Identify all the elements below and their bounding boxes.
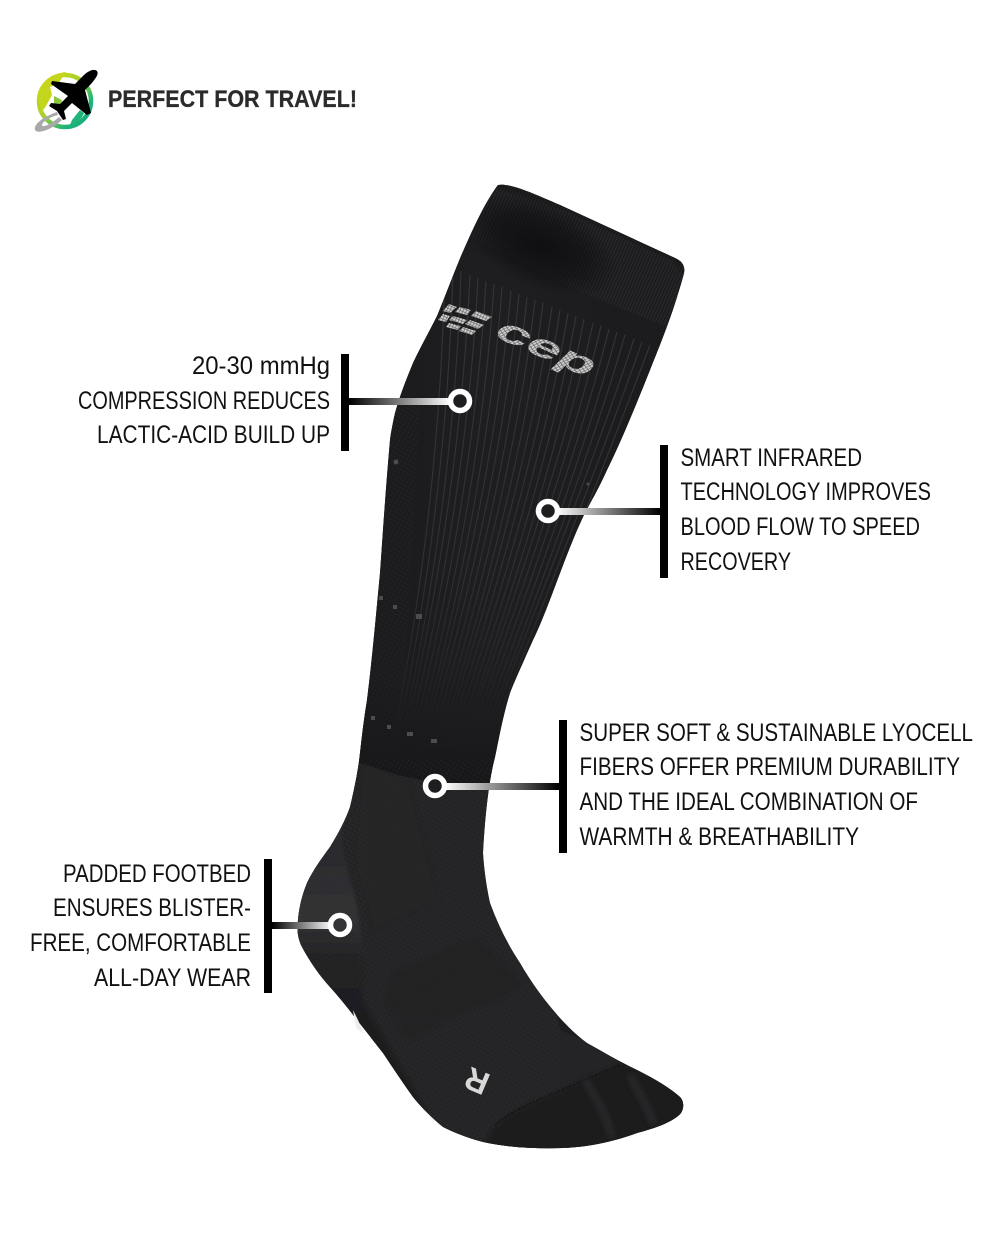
brand letters: cep <box>485 313 609 383</box>
connector line <box>556 508 660 515</box>
text: lyocell: WARMTH & BREATHABILITY <box>580 823 859 851</box>
heel <box>298 824 431 1116</box>
text: infrared: RECOVERY <box>680 548 791 576</box>
callout: infrared <box>538 444 931 578</box>
text: compression: COMPRESSION REDUCES <box>78 387 330 415</box>
swoosh <box>35 112 62 132</box>
text: footbed: ALL-DAY WEAR <box>94 964 251 992</box>
bracket bar <box>559 720 567 853</box>
left knit of calf <box>370 405 420 682</box>
text: lyocell: AND THE IDEAL COMBINATION OF <box>580 788 918 816</box>
foot base <box>298 762 684 1148</box>
bracket bar <box>341 354 349 451</box>
knit texture on foot <box>362 760 560 1018</box>
heading: perfect for travel: PERFECT FOR TRAVEL! <box>108 86 357 113</box>
ankle shade <box>354 696 510 790</box>
travel badge <box>35 70 357 132</box>
text: infrared: SMART INFRARED <box>680 444 862 472</box>
toe <box>486 1062 684 1148</box>
marker <box>330 916 350 934</box>
callout: footbed <box>30 859 350 993</box>
marker <box>426 776 444 796</box>
callout: lyocell <box>426 719 973 853</box>
calf section <box>359 252 678 772</box>
text: infrared: BLOOD FLOW TO SPEED <box>680 513 920 541</box>
R mark on toe: R <box>459 1060 495 1102</box>
bracket bar <box>660 445 668 578</box>
text: compression <box>78 352 330 449</box>
cep logo mark <box>438 304 609 383</box>
calf dots <box>371 460 590 743</box>
connector line <box>349 398 451 405</box>
sock product image <box>298 184 684 1148</box>
text: footbed: PADDED FOOTBED <box>63 860 251 888</box>
calf ribs <box>404 271 650 718</box>
text: lyocell <box>580 719 973 851</box>
text: compression: 20-30 mmHg <box>192 352 330 380</box>
marker <box>450 392 470 410</box>
connector line <box>444 783 559 790</box>
cuff rim shadow <box>498 185 683 270</box>
bracket bar <box>264 859 272 993</box>
text: compression: LACTIC-ACID BUILD UP <box>97 421 330 449</box>
brand stripes <box>438 304 492 335</box>
cuff <box>470 184 684 327</box>
ankle ribs <box>352 762 440 930</box>
heel white mark <box>353 1010 364 1034</box>
callout: compression <box>78 352 470 451</box>
text: infrared <box>680 444 931 576</box>
text: footbed: FREE, COMFORTABLE <box>30 929 251 957</box>
midfoot rib band <box>390 941 514 1033</box>
connector line <box>272 922 332 929</box>
text: footbed <box>30 860 251 992</box>
text: footbed: ENSURES BLISTER- <box>53 894 251 922</box>
marker <box>538 502 558 520</box>
airplane <box>49 70 98 120</box>
text: infrared: TECHNOLOGY IMPROVES <box>680 478 931 506</box>
icon: globe with airplane <box>35 70 98 132</box>
